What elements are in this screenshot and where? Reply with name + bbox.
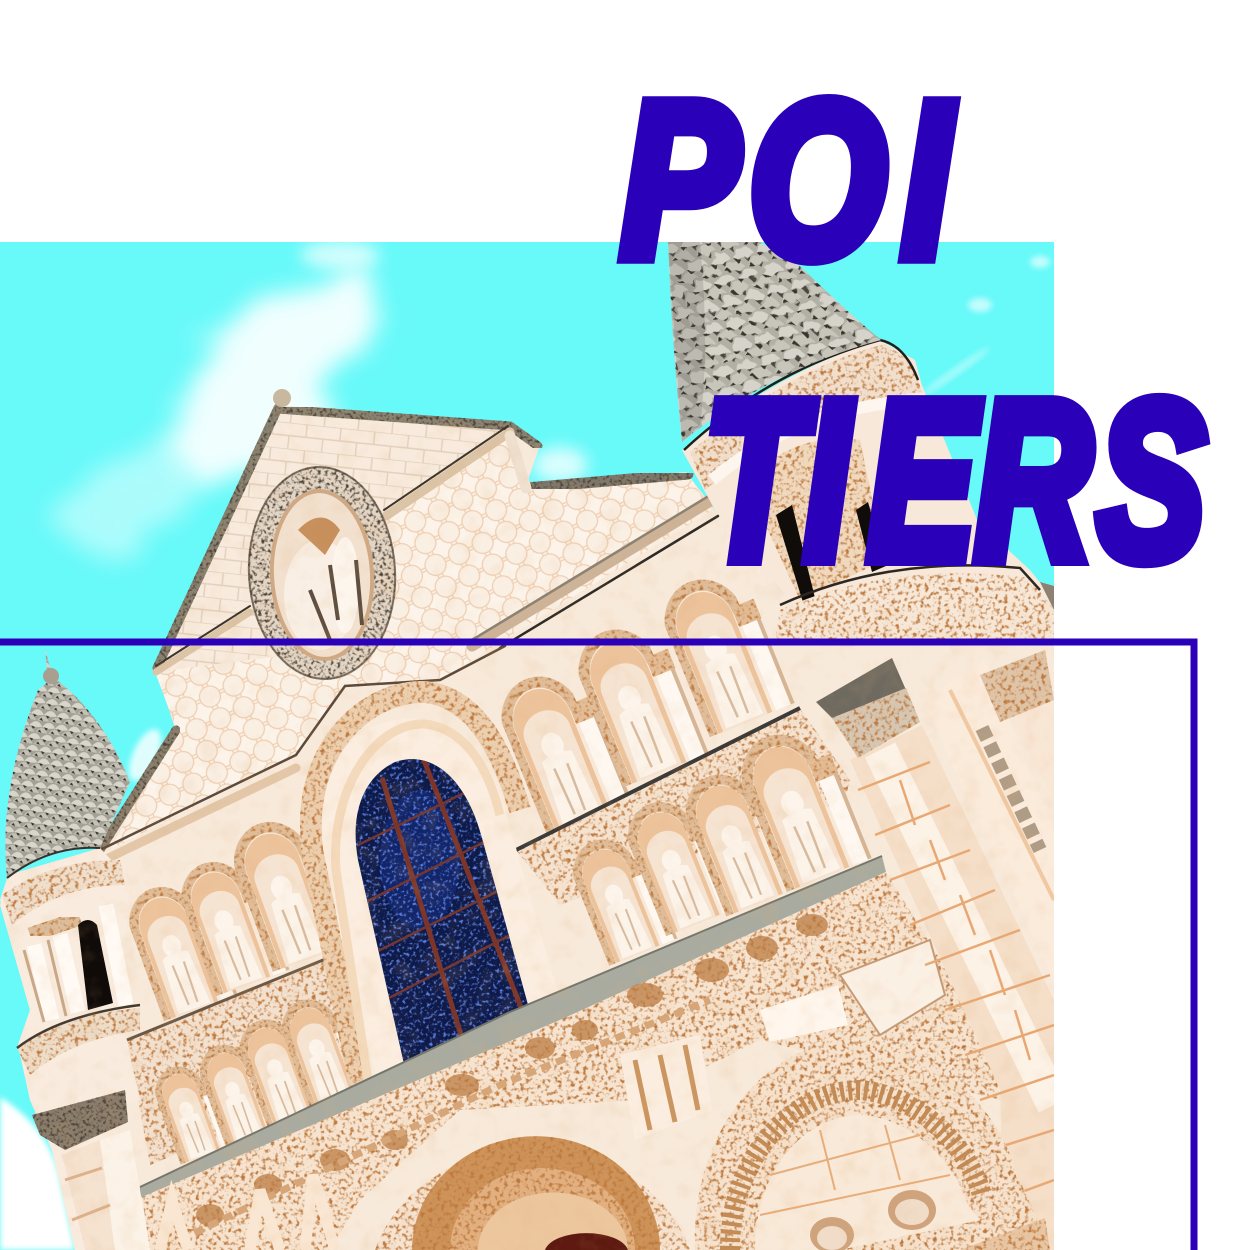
sculpted frieze: [142, 872, 1000, 1250]
gable cornices: [100, 408, 688, 850]
title line: POI: POI: [621, 57, 955, 303]
lower right arch: [695, 1040, 1050, 1250]
lower arcade, right: [568, 722, 873, 965]
diagonal stringcourses: [100, 494, 718, 862]
stone texture: [0, 400, 1054, 1250]
building: facade mass: [0, 405, 1054, 1250]
finial on gable: [273, 389, 291, 407]
photo: sky background: [0, 235, 1054, 1250]
title line: TIERS: TIERS: [704, 355, 1205, 606]
right tower cone: [668, 242, 881, 442]
gable masonry pattern: [160, 412, 505, 672]
frame line: [0, 642, 1194, 1250]
carved band and arcade, lower left: [127, 958, 371, 1165]
carved band below upper arcade: [516, 708, 850, 905]
window surround: [311, 692, 560, 1085]
left tower cone: [5, 648, 130, 878]
grey ledge band: [138, 856, 886, 1197]
right tower: [682, 340, 1054, 640]
upper arcade, right of window: [495, 567, 796, 833]
large column, right: [816, 650, 1054, 1250]
clouds: [0, 241, 1050, 1250]
left tower: [0, 848, 150, 1250]
title: [621, 57, 1205, 606]
lower left arches: [375, 1136, 690, 1250]
stained-glass window: [356, 759, 528, 1062]
arcade, left of window: [129, 822, 343, 1022]
medallion: [244, 463, 400, 683]
